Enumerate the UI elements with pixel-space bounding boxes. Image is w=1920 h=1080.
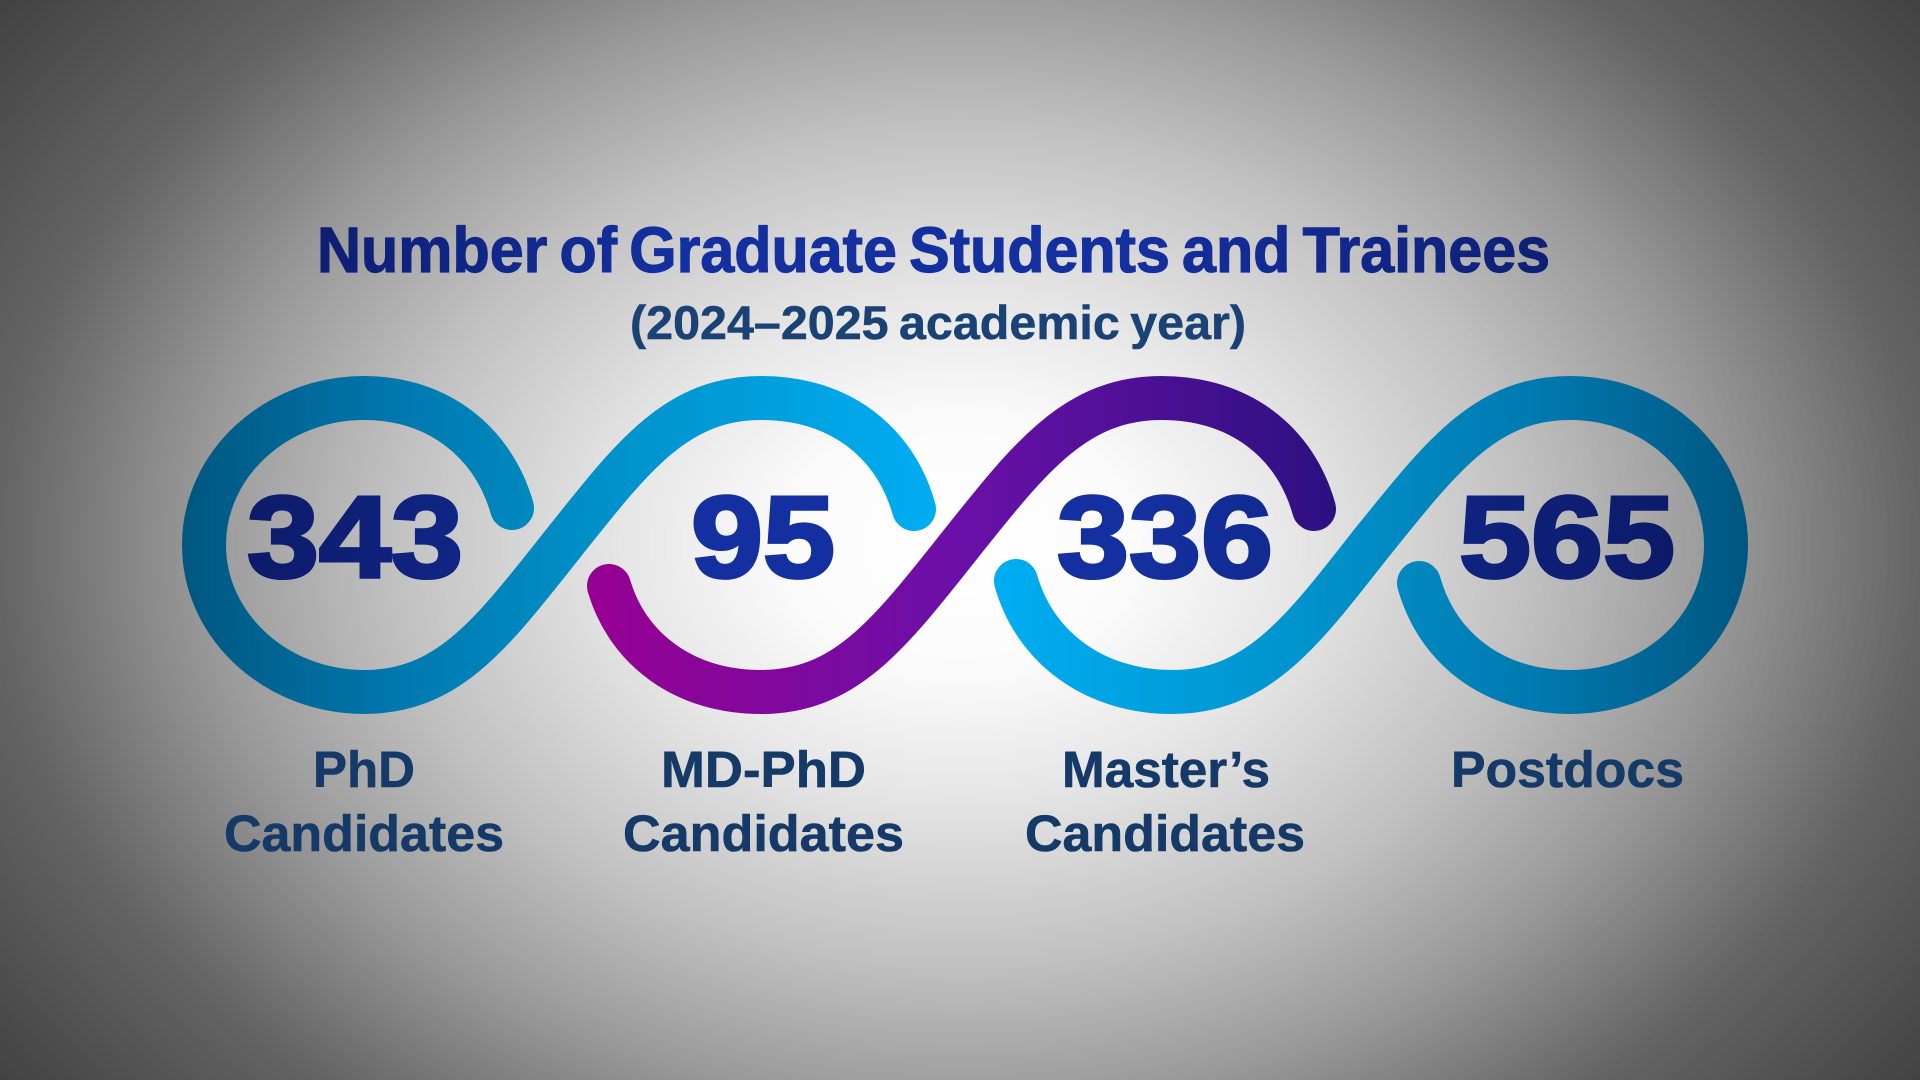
ribbon: left loop [204, 398, 914, 692]
label: PhD Candidates [224, 741, 504, 862]
number: 95: 95 [691, 472, 835, 602]
label: Master's Candidates [1025, 741, 1305, 862]
label: Master's Candidates: Master’s [1062, 741, 1270, 798]
subtitle: (2024–2025 academic year) [630, 296, 1246, 349]
label: MD-PhD Candidates: Candidates [623, 805, 904, 862]
ribbon: cyan to teal right loop [1016, 398, 1726, 692]
ribbon: purple middle [609, 398, 1314, 692]
label: PhD Candidates: PhD [313, 741, 415, 798]
label: MD-PhD Candidates [623, 741, 904, 862]
number: 565: 565 [1459, 472, 1675, 602]
number: 343: 343 [247, 472, 463, 602]
label: Master's Candidates: Candidates [1025, 805, 1305, 862]
label: PhD Candidates: Candidates [224, 805, 504, 862]
number: 336: 336 [1057, 472, 1273, 602]
title: Number of Graduate Students and Trainees [317, 214, 1550, 286]
label: MD-PhD Candidates: MD-PhD [661, 741, 866, 798]
label: Postdocs: Postdocs [1451, 741, 1684, 798]
